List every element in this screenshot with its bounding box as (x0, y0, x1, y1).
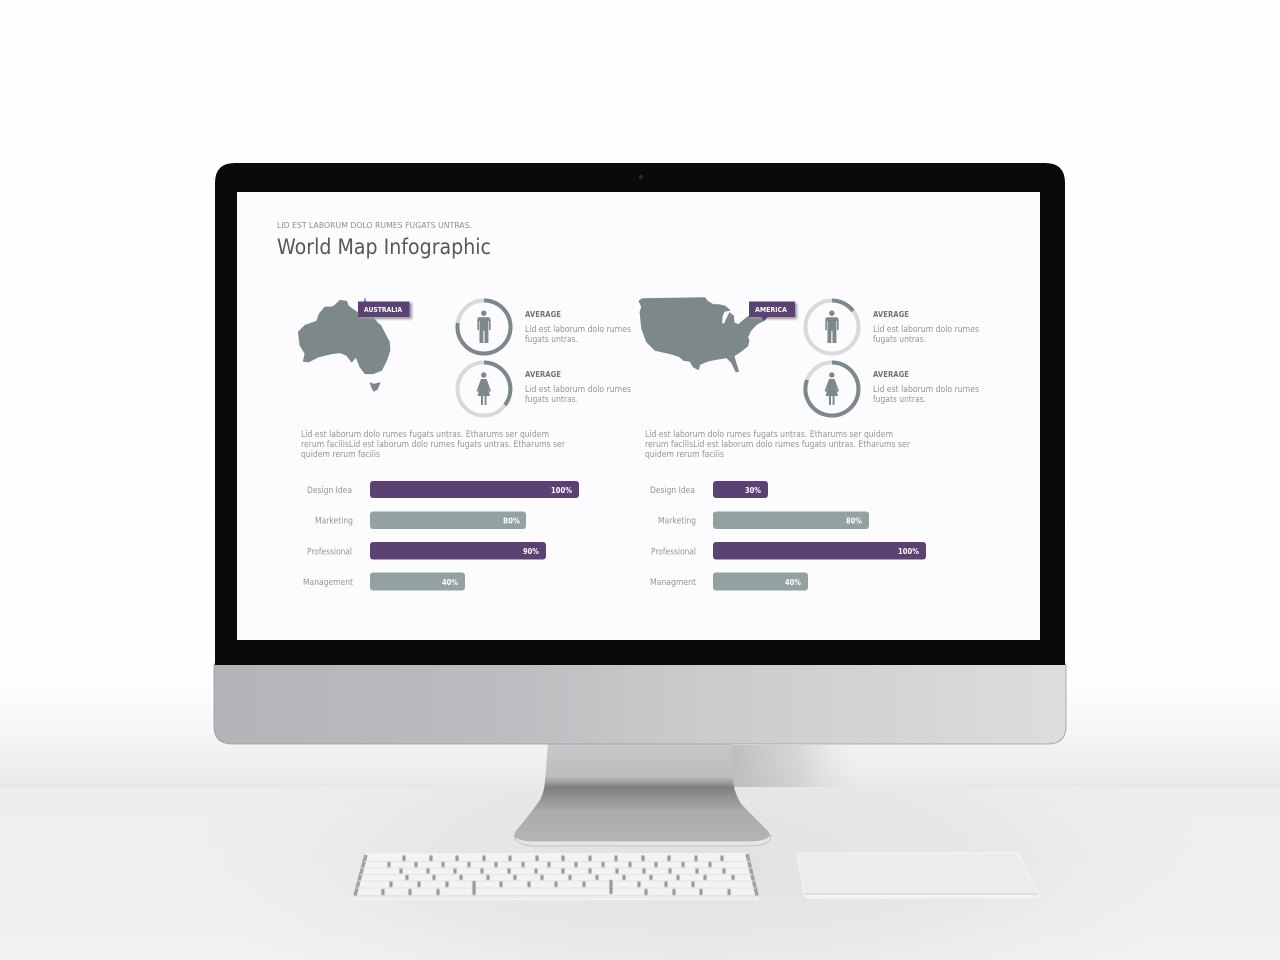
paragraph: america: rerum facilisLid est laborum dolo rumes fugats untras. Etharums ser (645, 440, 910, 450)
paragraph: australia (301, 430, 565, 460)
donut: male average (806, 300, 858, 354)
monitor stand (514, 744, 770, 843)
stat text: female: Lid est laborum dolo rumes (873, 385, 980, 395)
bar: managment 40% (650, 572, 808, 590)
bar: marketing 80% (658, 512, 869, 529)
label: america: AMERICA (755, 306, 788, 314)
paragraph: australia: rerum facilisLid est laborum dolo rumes fugats untras. Etharums ser (301, 440, 565, 450)
desk shading (180, 787, 1220, 960)
bar: professional 90%: 90% (523, 547, 539, 556)
bar: design idea 100% (307, 481, 579, 498)
bar: managment 40%: 40% (785, 578, 801, 587)
label: australia: AUSTRALIA (364, 306, 402, 314)
bar: professional 100%: 100% (898, 547, 919, 556)
trackpad (797, 853, 1038, 898)
donut: male average (457, 300, 510, 354)
paragraph: america: Lid est laborum dolo rumes fugats untras. Etharums ser quidem (645, 430, 893, 440)
stand shadow on wall (730, 745, 855, 787)
stat text: female: AVERAGE (873, 370, 909, 379)
icon: male (825, 310, 839, 343)
stat text: male: AVERAGE (525, 310, 561, 319)
donut: female average (458, 362, 510, 416)
stat text: female (873, 370, 980, 405)
stat text: male: Lid est laborum dolo rumes (525, 325, 632, 335)
bar: professional 100% (651, 542, 926, 560)
icon: female (825, 372, 839, 405)
paragraph: australia: quidem rerum facilis (301, 450, 381, 460)
monitor bezel (215, 163, 1065, 665)
bar: design idea 30%: Design Idea (650, 486, 695, 496)
desk surface (0, 787, 1280, 960)
title: World Map Infographic (277, 235, 491, 260)
webcam (639, 175, 643, 179)
key gaps (383, 856, 733, 895)
bar: marketing 80%: 80% (503, 516, 520, 526)
stat text: male: fugats untras. (525, 335, 578, 345)
bar chart: australia (303, 481, 579, 590)
stat text: female: AVERAGE (525, 370, 561, 379)
stat text: male: AVERAGE (873, 310, 909, 319)
bar: management 40%: Management (303, 578, 354, 588)
bar: marketing 80% (315, 512, 526, 529)
bar: marketing 80%: Marketing (315, 516, 353, 526)
slide background (237, 192, 1040, 640)
monitor chin (214, 664, 1066, 744)
stat text: male: fugats untras. (873, 335, 926, 345)
stat text: female (525, 370, 632, 405)
stat text: female: fugats untras. (525, 395, 578, 405)
bar: marketing 80%: Marketing (658, 516, 696, 526)
label: america (749, 302, 797, 321)
label: australia (358, 302, 412, 319)
panel: australia (298, 298, 632, 590)
stand base edge (514, 835, 771, 846)
paragraph: australia: Lid est laborum dolo rumes fugats untras. Etharums ser quidem (301, 430, 549, 440)
panel: america (639, 298, 980, 590)
bar: management 40% (303, 572, 465, 590)
paragraph: america: quidem rerum facilis (645, 450, 725, 460)
bar: design idea 30% (650, 481, 768, 498)
bar: management 40%: 40% (442, 578, 458, 587)
keyboard (353, 853, 759, 900)
stat text: male: Lid est laborum dolo rumes (873, 325, 980, 335)
stat text: female: Lid est laborum dolo rumes (525, 385, 632, 395)
bar: marketing 80%: 80% (846, 516, 862, 526)
bar chart: america (650, 481, 926, 590)
bar: design idea 100%: Design Idea (307, 486, 352, 496)
icon: female (477, 372, 491, 405)
icon: male (477, 310, 491, 343)
stat text: male (873, 310, 980, 345)
stat text: female: fugats untras. (873, 395, 926, 405)
map: america (639, 298, 764, 372)
bar: managment 40%: Managment (650, 578, 697, 588)
stat text: male (525, 310, 632, 345)
donut: female average (805, 362, 858, 416)
map: australia (298, 298, 390, 391)
bar: professional 100%: Professional (651, 548, 696, 558)
bar: design idea 100%: 100% (551, 486, 572, 495)
bar: professional 90%: Professional (307, 548, 352, 558)
bar: professional 90% (307, 542, 546, 560)
eyebrow text: LID EST LABORUM DOLO RUMES FUGATS UNTRAS. (277, 221, 472, 230)
paragraph: america (645, 430, 910, 460)
screen slide (237, 192, 1040, 640)
bar: design idea 30%: 30% (745, 486, 761, 495)
